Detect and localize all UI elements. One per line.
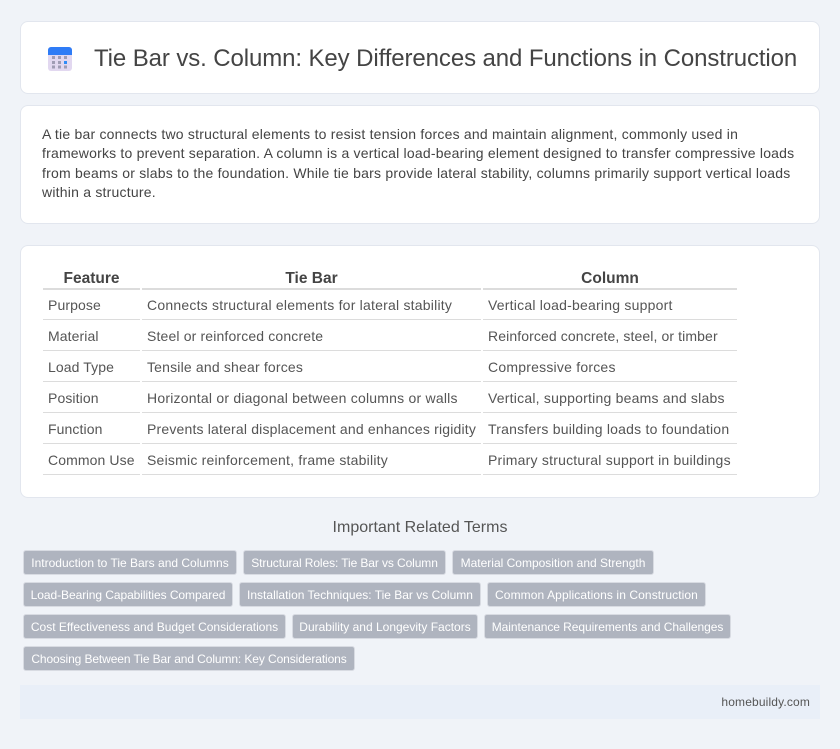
header: Tie Bar: Tie Bar bbox=[285, 270, 338, 287]
row: Material: Steel or reinforced concrete bbox=[147, 328, 323, 344]
row: Common Use: Common Use bbox=[48, 452, 135, 468]
chip bbox=[23, 646, 355, 671]
header card bbox=[20, 21, 820, 94]
row: Function: Transfers building loads to foundation bbox=[488, 421, 729, 437]
footer text: homebuildy.com bbox=[721, 695, 810, 709]
comparison table panel bbox=[20, 245, 820, 498]
row: Material: Reinforced concrete, steel, or timber bbox=[488, 328, 718, 344]
chip: Cost Effectiveness and Budget Considerations bbox=[31, 620, 278, 634]
intro text bbox=[42, 126, 794, 200]
intro panel bbox=[20, 105, 820, 224]
row: Purpose: Connects structural elements for lateral stability bbox=[147, 297, 452, 313]
row: Common Use: Primary structural support in buildings bbox=[488, 452, 731, 468]
row: Function: Function bbox=[48, 421, 102, 437]
row: Load Type: Tensile and shear forces bbox=[147, 359, 303, 375]
chip: Maintenance Requirements and Challenges bbox=[492, 620, 723, 634]
row: Purpose: Purpose bbox=[48, 297, 101, 313]
chip bbox=[484, 614, 731, 639]
related terms heading: Important Related Terms bbox=[333, 519, 507, 536]
title: Tie Bar vs. Column: Key Differences and Functions in Construction bbox=[94, 45, 797, 72]
intro text: within a structure. bbox=[42, 184, 156, 200]
row: Function bbox=[43, 421, 737, 444]
chip bbox=[23, 582, 233, 607]
row: Load Type: Compressive forces bbox=[488, 359, 616, 375]
row: Common Use: Seismic reinforcement, frame stability bbox=[147, 452, 388, 468]
chip: Material Composition and Strength bbox=[461, 556, 645, 570]
intro text: from beams or slabs to the foundation. While tie bars provide lateral stability, columns primarily support vertical loads bbox=[42, 165, 790, 181]
chip: Durability and Longevity Factors bbox=[299, 620, 471, 634]
row: Function: Prevents lateral displacement and enhances rigidity bbox=[147, 421, 476, 437]
row: Material: Material bbox=[48, 328, 99, 344]
chip: Structural Roles: Tie Bar vs Column bbox=[251, 556, 438, 570]
chip: Load-Bearing Capabilities Compared bbox=[31, 588, 225, 602]
row: Load Type: Load Type bbox=[48, 359, 114, 375]
row: Position: Vertical, supporting beams and slabs bbox=[488, 390, 725, 406]
chip bbox=[23, 614, 286, 639]
row: Position bbox=[43, 390, 737, 413]
row: Material bbox=[43, 328, 737, 351]
related terms chips bbox=[23, 550, 731, 671]
chip bbox=[239, 582, 481, 607]
row: Common Use bbox=[43, 452, 737, 475]
header: Column: Column bbox=[581, 270, 639, 287]
chip bbox=[292, 614, 478, 639]
chip bbox=[243, 550, 446, 575]
row: Load Type bbox=[43, 359, 737, 382]
intro text: A tie bar connects two structural elements to resist tension forces and maintain alignment, commonly used in bbox=[42, 126, 738, 142]
chip: Introduction to Tie Bars and Columns bbox=[31, 556, 229, 570]
chip: Common Applications in Construction bbox=[495, 588, 698, 602]
row: Purpose bbox=[43, 297, 737, 320]
row: Position: Position bbox=[48, 390, 99, 406]
icon: calendar bbox=[48, 47, 72, 71]
footer bar bbox=[20, 685, 820, 719]
intro text: frameworks to prevent separation. A column is a vertical load-bearing element designed to transfer compressive loads bbox=[42, 145, 794, 161]
chip: Installation Techniques: Tie Bar vs Column bbox=[247, 588, 473, 602]
header: Feature: Feature bbox=[64, 270, 120, 287]
chip: Choosing Between Tie Bar and Column: Key Considerations bbox=[31, 652, 347, 666]
chip bbox=[452, 550, 654, 575]
chip bbox=[487, 582, 706, 607]
row: Position: Horizontal or diagonal between columns or walls bbox=[147, 390, 458, 406]
chip bbox=[23, 550, 237, 575]
row: Purpose: Vertical load-bearing support bbox=[488, 297, 673, 313]
